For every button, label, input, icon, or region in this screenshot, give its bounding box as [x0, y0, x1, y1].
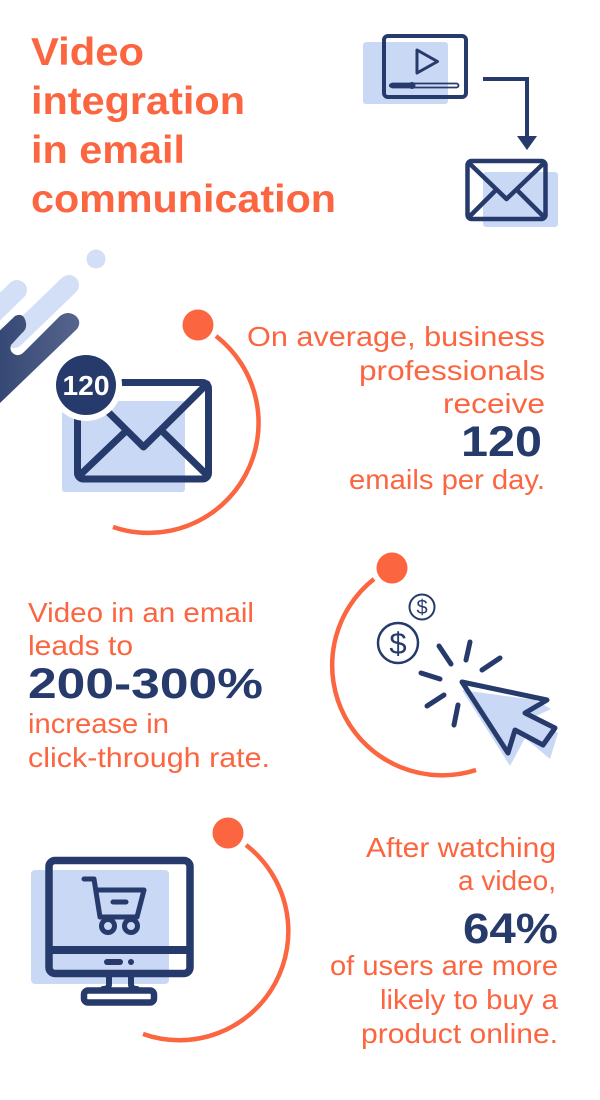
text block: click-through rate. [28, 742, 270, 773]
panel: click-through rate [28, 552, 558, 775]
text block: increase in [28, 708, 169, 739]
title: integration [31, 80, 245, 123]
arc with dot [332, 552, 476, 775]
icon: coins [378, 594, 434, 663]
text block: Video in an email [28, 597, 254, 628]
title: in email [31, 129, 185, 172]
icon: envelope with badge [50, 349, 208, 492]
icon: video player [363, 36, 466, 104]
text block [28, 597, 270, 773]
text block: emails per day. [349, 464, 545, 495]
icon: envelope [468, 161, 558, 227]
decorative stripes [0, 250, 106, 403]
icon: coins: $ [389, 626, 407, 661]
icon: cursor [421, 642, 558, 766]
text block: On average, business [247, 321, 545, 352]
title: communication [31, 178, 336, 221]
text block [247, 321, 545, 495]
text block: receive [443, 388, 545, 419]
text block: 64% [463, 905, 558, 953]
title: Video [31, 31, 144, 74]
icon: coins: $ [416, 597, 428, 619]
text block [330, 832, 558, 1049]
text block: likely to buy a [380, 984, 558, 1015]
text block: product online. [361, 1018, 558, 1049]
panel: 120 emails [50, 310, 545, 533]
arc with dot [113, 310, 259, 533]
panel: 64% of users [31, 818, 558, 1049]
text block: After watching [366, 832, 556, 863]
text block: 120 [461, 418, 542, 466]
arc with dot [143, 818, 288, 1040]
title [31, 31, 336, 221]
text block: a video, [458, 865, 556, 896]
text block: professionals [359, 355, 545, 386]
icon: monitor with cart [31, 860, 190, 1002]
text block: leads to [28, 630, 133, 661]
arrow: video to email [483, 79, 537, 150]
text block: of users are more [330, 950, 558, 981]
icon: envelope with badge: 120 [62, 370, 110, 401]
text block: 200-300% [28, 660, 263, 708]
